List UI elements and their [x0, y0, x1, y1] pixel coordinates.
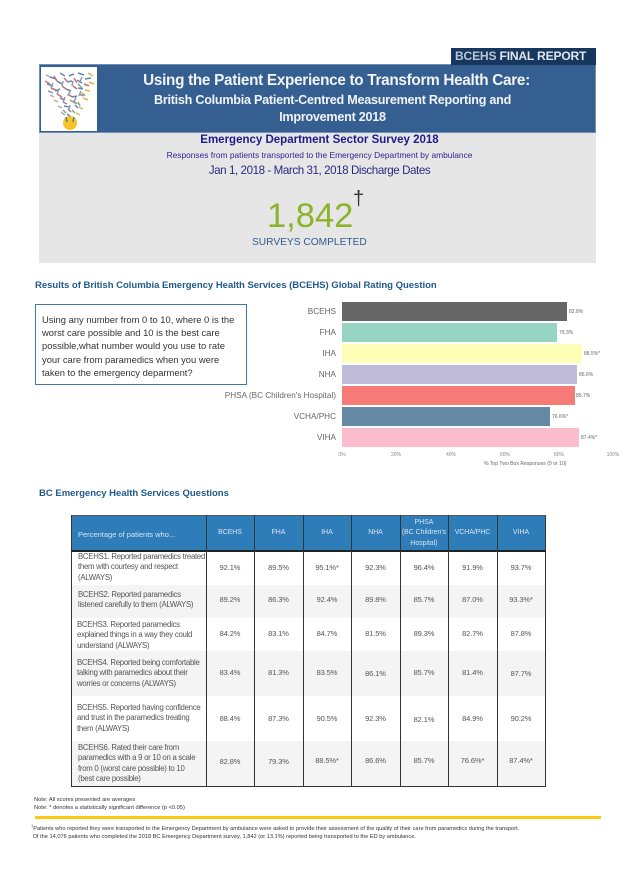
table: 93.3%* [509, 595, 533, 604]
table [71, 515, 546, 787]
row 3: explained things in a way they could [77, 630, 192, 639]
panel: survey summary [39, 133, 596, 263]
table: 83.4% [220, 668, 240, 677]
table: 92.3% [365, 563, 386, 572]
table: 90.2% [511, 714, 531, 723]
row 1: them with courtesy and respect [78, 562, 178, 571]
table: 82.1% [414, 715, 434, 724]
bar: FHA [342, 323, 557, 342]
bar chart: NHA [319, 370, 336, 379]
bar: BCEHS [342, 302, 567, 321]
table grid lines [71, 515, 546, 787]
table: 85.7% [414, 756, 434, 765]
row 2 [78, 590, 193, 609]
title: British Columbia Patient-Centred Measurement Reporting and [154, 93, 511, 107]
table header [72, 516, 545, 550]
x axis ticks: 80% [554, 452, 564, 458]
row 3: understand (ALWAYS) [77, 641, 149, 650]
row 5: and trust in the paramedics treating [77, 713, 190, 722]
table: 84.7% [317, 629, 337, 638]
row 4 [77, 658, 200, 688]
table: 87.4%* [509, 756, 533, 765]
yellow divider [35, 816, 601, 818]
footnote: †Patients who reported they were transported to the Emergency Department by ambulance were asked to provide their assessment of the quality of their care from paramedics during the transport. [31, 823, 519, 832]
title: Improvement 2018 [279, 110, 386, 124]
table: Hospital) [410, 540, 438, 547]
bar chart: VCHA/PHC [294, 412, 336, 421]
x axis ticks: 100% [607, 452, 619, 458]
bar chart: 86.6% [579, 372, 593, 378]
bar chart: VIHA [317, 433, 336, 442]
bar chart: 79.3% [559, 330, 573, 336]
question box: worst care possible and 10 is the best care [42, 327, 220, 338]
bar: PHSA [342, 386, 574, 405]
table: BCEHS [218, 529, 242, 536]
table: 85.7% [414, 668, 434, 677]
table: 96.4% [414, 563, 434, 572]
bar: NHA [342, 365, 577, 384]
table: IHA [321, 529, 333, 536]
row 3 [77, 620, 192, 650]
bar chart: 76.6%* [552, 414, 568, 420]
dagger: † [353, 188, 364, 210]
row 6: (best care possible) [78, 774, 141, 783]
table: 88.4% [220, 714, 240, 723]
question box: Using any number from 0 to 10, where 0 is the [42, 314, 234, 325]
row 6: paramedics with a 9 or 10 on a scale [78, 753, 195, 762]
discharge dates: Jan 1, 2018 - March 31, 2018 Discharge Dates [209, 164, 430, 177]
table: 82.8% [220, 757, 240, 766]
row 5: BCEHS5. Reported having confidence [77, 703, 200, 712]
table: 95.1%* [315, 563, 339, 572]
footnote: Of the 14,076 patients who completed the 2018 BC Emergency Department survey, 1,842 (or 13.1%) reported being transported to the ED by ambulance. [33, 834, 416, 840]
notes: Note: All scores presented are averages [34, 797, 135, 803]
row backgrounds [72, 585, 545, 618]
table: 85.7% [414, 595, 434, 604]
table: 92.3% [365, 714, 386, 723]
bar: IHA [342, 344, 582, 363]
notes [34, 797, 185, 811]
table: VIHA [513, 529, 529, 536]
table: 82.7% [462, 629, 483, 638]
bar chart: 88.5%* [584, 351, 600, 357]
row 3: BCEHS3. Reported paramedics [77, 620, 180, 629]
row 1: BCEHS1. Reported paramedics treated [78, 552, 205, 561]
report tag: BCEHS FINAL REPORT [455, 49, 586, 63]
row 6 [78, 743, 196, 783]
question box: taken to the emergency deparment? [42, 367, 193, 378]
bar chart: PHSA (BC Children's Hospital) [225, 391, 336, 400]
row 2: BCEHS2. Reported paramedics [78, 590, 181, 599]
x axis ticks [338, 452, 620, 458]
table: (BC Children's [402, 529, 446, 536]
title: Using the Patient Experience to Transform Health Care: [143, 72, 530, 89]
table: 93.7% [511, 563, 531, 572]
row 5 [77, 703, 200, 733]
table: 83.5% [317, 668, 337, 677]
table: 89.3% [414, 629, 434, 638]
table: 87.8% [511, 629, 531, 638]
table: 81.4% [462, 668, 483, 677]
x axis title: % Top Two Box Responses (9 or 10) [484, 461, 566, 467]
table: 84.2% [220, 629, 240, 638]
row 1 [78, 552, 205, 582]
row 6: from 0 (worst care possible) to 10 [78, 764, 185, 773]
table: 92.4% [317, 595, 337, 604]
title [143, 72, 530, 124]
table: 83.1% [268, 629, 289, 638]
table: VCHA/PHC [455, 529, 490, 536]
row 4: talking with paramedics about their [77, 668, 188, 677]
table: 90.5% [317, 714, 337, 723]
bar chart: 87.4%* [581, 435, 597, 441]
table: 86.1% [365, 669, 386, 678]
question box [35, 304, 247, 385]
bar chart: FHA [320, 328, 336, 337]
table: FHA [272, 529, 285, 536]
table: 92.1% [220, 563, 240, 572]
row 4: worries or concerns (ALWAYS) [77, 679, 176, 688]
heading: global rating: Results of British Columbia Emergency Health Services (BCEHS) Global Rating Question [35, 280, 437, 291]
table: 81.5% [365, 629, 386, 638]
x axis ticks: 40% [446, 452, 456, 458]
survey heading: Emergency Department Sector Survey 2018 [200, 134, 439, 146]
table: Percentage of patients who... [78, 530, 175, 539]
table: 79.3% [268, 757, 289, 766]
header banner [39, 64, 596, 133]
table: 84.9% [462, 714, 483, 723]
notes: Note: * denotes a statistically significant difference (p <0.05) [34, 805, 185, 811]
table: 88.5%* [315, 756, 339, 765]
table: 81.3% [268, 668, 289, 677]
icon: logo of people above a sun [41, 67, 97, 131]
row 1: (ALWAYS) [78, 573, 112, 582]
row 2: listened carefully to them (ALWAYS) [78, 600, 193, 609]
big number: surveys: 1,842 [267, 197, 353, 235]
surveys completed label: SURVEYS COMPLETED [252, 237, 367, 248]
bar chart [225, 302, 620, 467]
table: 91.9% [462, 563, 483, 572]
row 5: them (ALWAYS) [77, 724, 129, 733]
table: 76.6%* [461, 756, 484, 765]
x axis ticks: 20% [391, 452, 401, 458]
table: 87.0% [462, 595, 483, 604]
table: 86.6% [365, 756, 386, 765]
footnote [31, 823, 519, 840]
survey subtitle: Responses from patients transported to the Emergency Department by ambulance [167, 150, 472, 160]
bar chart: BCEHS [308, 307, 336, 316]
bar chart: 82.8% [569, 309, 583, 315]
bar chart: IHA [322, 349, 336, 358]
question box: your care from paramedics when you were [42, 354, 219, 365]
row 6: BCEHS6. Rated their care from [78, 743, 179, 752]
table: 87.7% [511, 669, 531, 678]
table: 89.5% [268, 563, 289, 572]
table: 87.3% [268, 714, 289, 723]
table: NHA [368, 529, 383, 536]
bar: VIHA [342, 428, 579, 447]
x axis ticks: 0% [338, 452, 346, 458]
table: 89.2% [220, 595, 240, 604]
table: 89.8% [365, 595, 386, 604]
question box: possible,what number would you use to rate [42, 340, 225, 351]
row 4: BCEHS4. Reported being comfortable [77, 658, 200, 667]
bar chart: 85.7% [576, 393, 590, 399]
table: 86.3% [268, 595, 289, 604]
bar: VCHA/PHC [342, 407, 550, 426]
table: PHSA [415, 519, 433, 526]
heading: questions: BC Emergency Health Services Questions [39, 488, 229, 499]
x axis ticks: 60% [500, 452, 510, 458]
